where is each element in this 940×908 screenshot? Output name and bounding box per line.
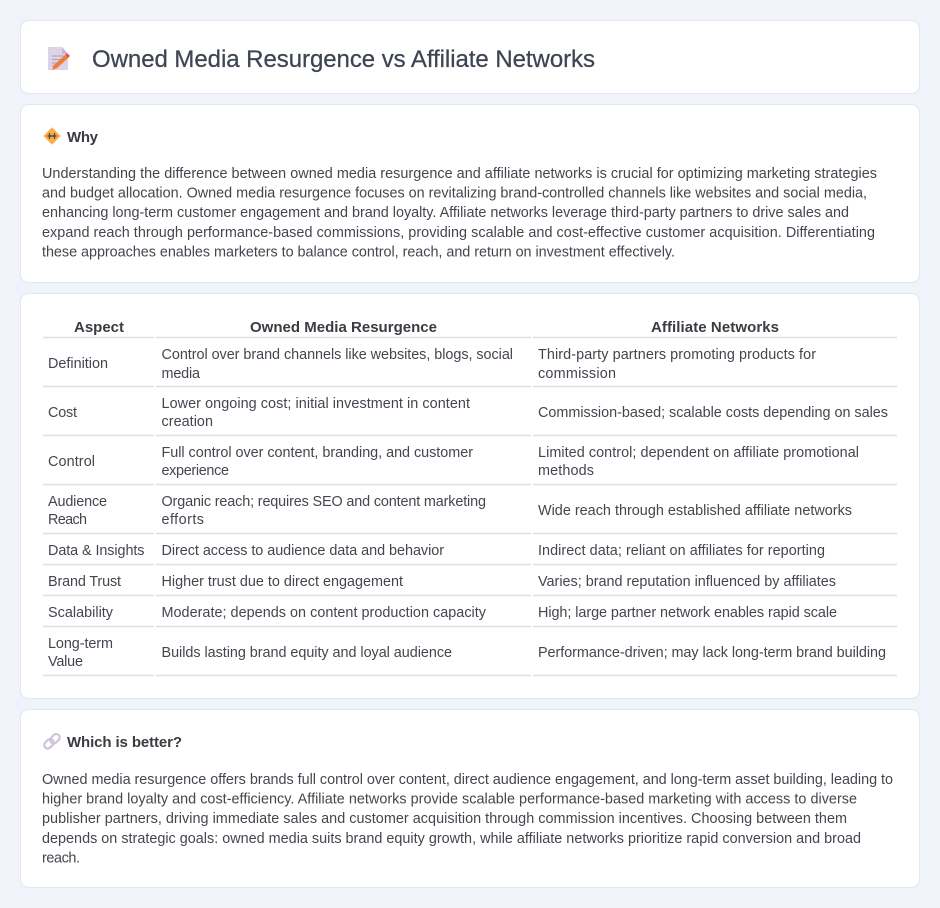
table row: cost: Cost	[48, 405, 77, 421]
table row: definition: Control over brand channels like websites, blogs, social	[162, 347, 513, 363]
text block: why paragraph: these approaches enables marketers to balance control, reach, and return on investment effectively.	[42, 244, 675, 260]
table header row: Aspect	[74, 319, 124, 336]
table row: data and insights	[48, 543, 825, 559]
table row: cost: creation	[162, 414, 213, 430]
table row: definition: Definition	[48, 356, 108, 372]
table header row: Affiliate Networks	[651, 319, 779, 336]
table row: long-term value	[48, 636, 886, 670]
icon: memo document with pencil	[48, 47, 70, 70]
table row: audience reach: Audience	[48, 494, 107, 510]
table row: cost	[48, 396, 888, 430]
text block: why paragraph: expand reach through performance-based commissions, providing scalable and cost-effective customer acquisition. Differentiating	[42, 225, 875, 241]
table row: data and insights: Direct access to audience data and behavior	[162, 543, 444, 559]
table row: scalability: Scalability	[48, 605, 114, 621]
table row: brand trust: Varies; brand reputation influenced by affiliates	[538, 574, 836, 590]
table row: control: Limited control; dependent on affiliate promotional	[538, 445, 859, 461]
table row: audience reach: Reach	[48, 512, 87, 528]
table row: definition: Third-party partners promoting products for	[538, 347, 816, 363]
text block: which is better paragraph: reach.	[42, 850, 80, 866]
text block: which is better paragraph: higher brand loyalty and cost-efficiency. Affiliate networks provide scalable performance-based marketing with access to diverse	[42, 792, 857, 808]
table row: definition	[48, 347, 816, 382]
text block: why paragraph: Understanding the difference between owned media resurgence and affiliate networks is crucial for optimizing marketing strategies	[42, 166, 877, 182]
text block: which is better paragraph: publisher partners, driving immediate sales and customer acquisition through commission incentives. Choosing between them	[42, 811, 847, 827]
table row: cost: Commission-based; scalable costs depending on sales	[538, 405, 888, 421]
table row: scalability	[48, 605, 837, 621]
table row: audience reach	[48, 494, 852, 528]
table row: cost: Lower ongoing cost; initial investment in content	[162, 396, 470, 412]
panel: title header	[20, 20, 920, 94]
text block: why paragraph	[42, 166, 877, 260]
table header row: Owned Media Resurgence	[250, 319, 437, 336]
table row: brand trust	[48, 574, 836, 590]
table row: control: Full control over content, branding, and customer	[162, 445, 473, 461]
table row: long-term value: Performance-driven; may lack long-term brand building	[538, 645, 886, 661]
table header row	[74, 319, 779, 336]
table row: control: Control	[48, 454, 95, 470]
table row: brand trust: Higher trust due to direct engagement	[162, 574, 403, 590]
table row: definition: commission	[538, 366, 616, 382]
table row: audience reach: efforts	[162, 512, 204, 528]
table row: long-term value: Value	[48, 654, 83, 670]
table row: data and insights: Data & Insights	[48, 543, 144, 559]
panel: which is better	[20, 710, 920, 888]
icon: orange diamond sign	[44, 128, 60, 144]
panel: comparison table	[20, 294, 920, 698]
table row: control	[48, 445, 859, 479]
table row: brand trust: Brand Trust	[48, 574, 121, 590]
title: Owned Media Resurgence vs Affiliate Networks	[92, 46, 595, 73]
heading: which is better: Which is better?	[67, 734, 182, 751]
text block: which is better paragraph: depends on strategic goals: owned media suits brand equity growth, while affiliate networks prioritize rapid conversion and broad	[42, 831, 861, 847]
icon: chain link	[43, 733, 61, 750]
table row: control: methods	[538, 463, 594, 479]
table row: long-term value: Builds lasting brand equity and loyal audience	[162, 645, 452, 661]
table row: scalability: High; large partner network enables rapid scale	[538, 605, 837, 621]
table row: scalability: Moderate; depends on content production capacity	[162, 605, 487, 621]
table row: long-term value: Long-term	[48, 636, 113, 652]
text block: why paragraph: enhancing long-term customer engagement and brand loyalty. Affiliate networks leverage third-party partners to drive sales and	[42, 205, 849, 221]
text block: why paragraph: and budget allocation. Owned media resurgence focuses on revitalizing brand-controlled channels like websites and social media,	[42, 186, 867, 202]
text block: which is better paragraph	[42, 772, 893, 866]
table row: control: experience	[162, 463, 229, 479]
panel: why	[20, 104, 920, 282]
table row: definition: media	[162, 366, 200, 382]
heading: why: Why	[67, 129, 99, 146]
text block: which is better paragraph: Owned media resurgence offers brands full control over content, direct audience engagement, and long-term asset building, leading to	[42, 772, 893, 788]
table row: audience reach: Wide reach through established affiliate networks	[538, 503, 852, 519]
table row: audience reach: Organic reach; requires SEO and content marketing	[162, 494, 486, 510]
table row: data and insights: Indirect data; reliant on affiliates for reporting	[538, 543, 825, 559]
